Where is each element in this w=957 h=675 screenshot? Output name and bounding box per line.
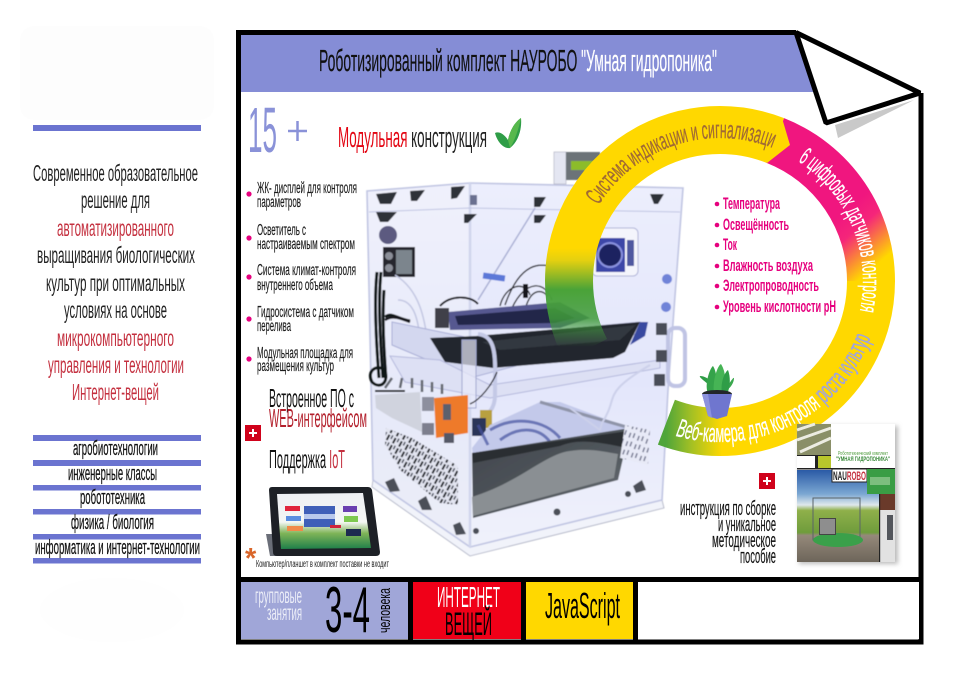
cell: internet of things: ИНТЕРНЕТ bbox=[437, 582, 500, 614]
asterisk: * bbox=[245, 543, 257, 575]
separator bbox=[633, 582, 638, 640]
book main picture bbox=[797, 470, 880, 562]
pink bullets bbox=[246, 191, 252, 362]
title: Роботизированный комплект НАУРОБО "Умная гидропоника" bbox=[319, 43, 717, 78]
ring diagram bbox=[545, 106, 895, 456]
description text: микрокомпьютерного bbox=[57, 325, 174, 351]
separator bbox=[521, 582, 526, 640]
description text: Интернет-вещей bbox=[72, 379, 159, 405]
ring label: sensors: 6 цифровых датчиков контроля bbox=[800, 148, 876, 313]
water reservoir lid bbox=[472, 402, 630, 455]
book green label bbox=[867, 469, 895, 494]
left sidebar: description bbox=[33, 125, 201, 405]
ring: left gradient arc bbox=[569, 130, 720, 350]
sidebar top bar bbox=[33, 125, 201, 131]
sensor feature list: Модульная площадка для bbox=[257, 345, 353, 362]
modular heading: Модульная конструкция bbox=[338, 122, 487, 154]
description text: автоматизированного bbox=[57, 215, 174, 241]
header band bbox=[240, 35, 814, 92]
cell: group sessions: занятия bbox=[267, 602, 302, 625]
ring: bottom arc bbox=[666, 281, 871, 432]
book cover: NAUROBO bbox=[833, 469, 866, 483]
rubber feet bbox=[385, 478, 646, 535]
tube connectors row bbox=[385, 378, 442, 394]
product photo: acrylic hydroponic box bbox=[367, 152, 685, 556]
sensor feature list: размещения культур bbox=[257, 358, 334, 375]
cell: group sessions: групповые bbox=[255, 585, 302, 608]
bottom strip bbox=[240, 573, 920, 646]
fan side discs bbox=[661, 274, 672, 312]
sensor feature list: настраиваемым спектром bbox=[257, 236, 355, 253]
infographic canvas: информатика и интернет-технологии bbox=[35, 537, 200, 559]
sensor feature list: ЖК- дисплей для контроля bbox=[257, 180, 357, 197]
description text: выращивания биологических bbox=[37, 242, 195, 268]
sensor list: Уровень кислотности pH bbox=[723, 297, 836, 316]
sensor list: Освещённость bbox=[723, 215, 789, 234]
description text: условиях на основе bbox=[64, 297, 167, 323]
flap outline bbox=[796, 32, 920, 123]
description text: управления и технологии bbox=[48, 352, 184, 378]
frame outline bbox=[238, 32, 921, 642]
separator bbox=[408, 582, 413, 640]
box edges bbox=[367, 183, 683, 547]
sensor feature list: параметров bbox=[257, 194, 301, 211]
honeycomb vent left bbox=[385, 428, 458, 505]
sensor feature list: перелива bbox=[257, 318, 291, 335]
cell: internet of things: ВЕЩЕЙ bbox=[445, 606, 492, 642]
left sidebar: subject list: инженерные классы bbox=[68, 463, 157, 485]
box faces bbox=[367, 183, 470, 547]
cell: group sessions: человека bbox=[375, 588, 394, 633]
description text bbox=[33, 160, 198, 405]
sensor feature list: Система климат-контроля bbox=[257, 262, 356, 279]
sensor feature list: Осветитель с bbox=[257, 222, 306, 239]
description text: культур при оптимальных bbox=[46, 270, 185, 296]
faint logo area top left bbox=[20, 26, 214, 120]
cell: group sessions: 3-4 bbox=[325, 573, 370, 646]
IoT support text: Поддержка IoT bbox=[269, 444, 345, 474]
icon: plant in blue pot bbox=[700, 364, 734, 419]
corner brackets bbox=[376, 186, 664, 223]
faint logo area bottom left bbox=[40, 578, 184, 642]
thin clear tubes left bbox=[395, 275, 428, 345]
counter 15 +: 15 bbox=[248, 94, 277, 166]
hinge clips right bbox=[654, 323, 667, 386]
flap white bbox=[797, 33, 921, 123]
middle handle and overflow tube bbox=[462, 334, 497, 418]
book shadow bbox=[799, 426, 898, 564]
sensor list: Ток bbox=[723, 235, 737, 254]
LCD display bbox=[554, 152, 600, 184]
sensor feature list: внутреннего объема bbox=[257, 277, 333, 294]
sensor feature list: Гидросистема с датчиком bbox=[257, 304, 354, 321]
book hydroponic photo bbox=[797, 424, 831, 455]
book cover: "УМНАЯ ГИДРОПОНИКА" bbox=[836, 457, 890, 463]
infographic canvas: Современное образовательное bbox=[33, 160, 198, 186]
sensor feature list bbox=[246, 180, 357, 375]
ring: arrow tip bbox=[762, 118, 790, 163]
black cable bundle bbox=[376, 272, 386, 378]
ring: pink arc bbox=[775, 140, 871, 282]
book logo bbox=[832, 469, 867, 482]
book cover bbox=[797, 424, 898, 564]
wiring and controller bbox=[385, 265, 555, 322]
sensor list bbox=[715, 194, 836, 316]
cell: empty white bbox=[638, 582, 919, 639]
frame and folded corner bbox=[238, 28, 930, 642]
icon: red plus left bbox=[245, 425, 261, 441]
icon: red plus right bbox=[759, 473, 775, 489]
infographic canvas: Встроенное ПО с bbox=[269, 383, 354, 413]
honeycomb vent right bbox=[620, 425, 650, 465]
sensor list: Электропроводность bbox=[723, 276, 819, 295]
manual text bbox=[680, 498, 776, 568]
left sidebar: subject list bbox=[33, 435, 201, 564]
left sidebar: subject list: агробиотехнологии bbox=[73, 438, 158, 460]
left sidebar: subject list: физика / биология bbox=[71, 512, 154, 534]
infographic canvas: методическое bbox=[712, 530, 776, 552]
book side strip bbox=[880, 494, 895, 562]
upper shelf bbox=[392, 322, 640, 378]
corner cut mask bbox=[797, 28, 930, 95]
left sidebar: subject list: робототехника bbox=[80, 487, 145, 509]
metal plate left bbox=[375, 392, 422, 432]
cell: group sessions bbox=[241, 573, 408, 646]
description text: решение для bbox=[81, 187, 150, 213]
book title: Робототехнический комплект bbox=[838, 450, 889, 457]
small fan unit bbox=[379, 226, 415, 277]
sensor bullets bbox=[715, 202, 719, 309]
infographic canvas: WEB-интерфейсом bbox=[269, 403, 367, 433]
infographic canvas: пособие bbox=[740, 546, 776, 568]
ring label: webcam: Веб-камера для контроля роста культур bbox=[676, 334, 874, 448]
orange pump block bbox=[422, 395, 468, 443]
middle shelf bbox=[390, 356, 660, 398]
software text bbox=[269, 383, 367, 433]
lower dark tray bbox=[472, 428, 630, 518]
footnote: Компьютер/планшет в комплект поставки не входит bbox=[256, 559, 389, 570]
sensor list: Влажность воздуха bbox=[723, 256, 813, 275]
ring: top yellow arc bbox=[719, 130, 775, 140]
blue cooling fan bbox=[592, 228, 638, 276]
fold shadow bbox=[835, 100, 914, 138]
cell: internet of things bbox=[413, 582, 521, 642]
side handle bbox=[668, 328, 685, 386]
infographic canvas: инструкция по сборке bbox=[680, 498, 776, 520]
upper dark tray bbox=[430, 322, 640, 368]
tablet bbox=[266, 487, 380, 556]
icon: green check mark bbox=[495, 118, 521, 148]
cell: JavaScript bbox=[526, 582, 633, 639]
sensor list: Температура bbox=[723, 194, 780, 213]
infographic canvas: и уникальное bbox=[718, 514, 776, 536]
cell: JavaScript: JavaScript bbox=[545, 585, 620, 626]
